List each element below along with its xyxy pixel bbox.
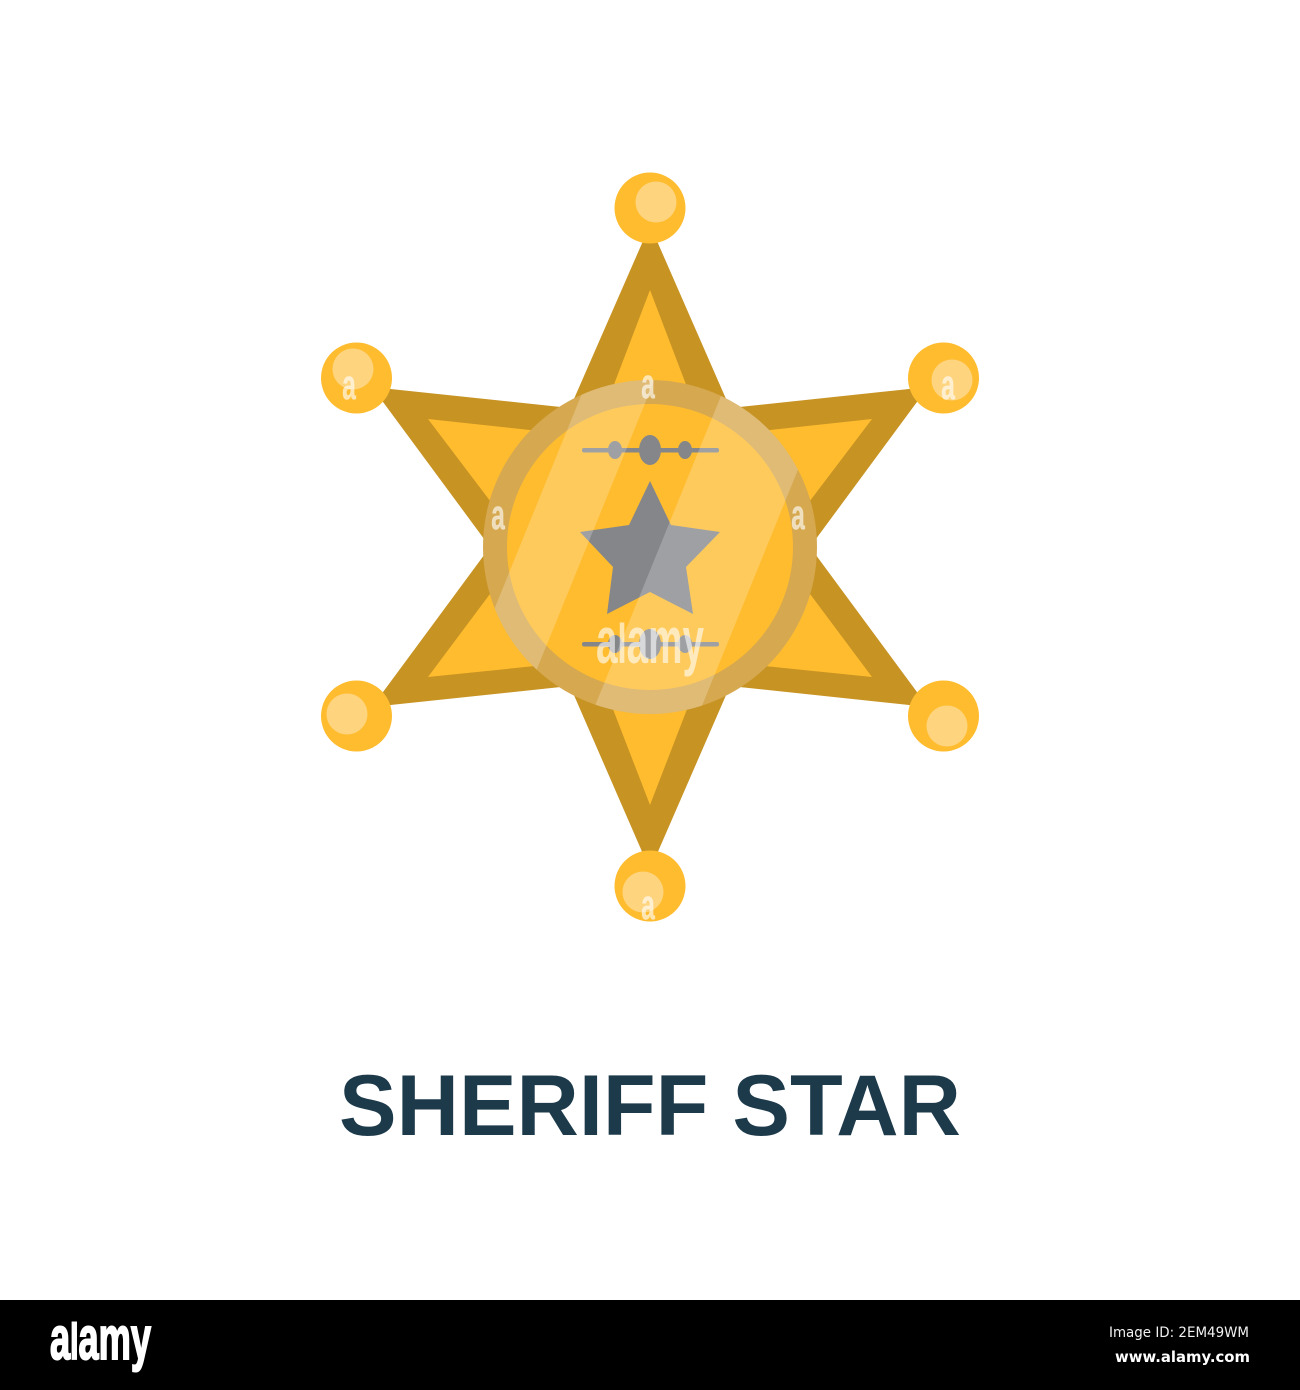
knob: upper right	[908, 342, 979, 414]
watermark: repeated letter marks: a	[641, 361, 655, 408]
watermark: repeated letter marks: a	[491, 492, 505, 539]
medallion ring	[483, 380, 817, 714]
watermark: central logo: alamy	[596, 603, 704, 677]
knob: bottom	[614, 850, 686, 922]
website: www.alamy.com	[1115, 1348, 1250, 1366]
knob: top	[614, 172, 686, 244]
star points inner fill	[428, 290, 872, 805]
footer logo: alamy	[50, 1305, 151, 1372]
star points outer frame	[372, 225, 928, 870]
knob: lower left	[321, 680, 392, 752]
medallion disc	[507, 404, 793, 690]
image id: Image ID: 2EM49WM	[1109, 1325, 1249, 1341]
watermark: repeated letter marks: a	[342, 362, 356, 409]
bottom ornament bar	[582, 629, 719, 659]
watermark: repeated letter marks: a	[791, 492, 805, 539]
footer bar	[0, 1300, 1300, 1390]
central grey star	[580, 481, 720, 614]
knob: lower right	[908, 680, 979, 752]
glass shine bands	[494, 380, 798, 714]
icon: sheriff star badge	[321, 172, 979, 922]
knob: upper left	[321, 342, 392, 414]
watermark: repeated letter marks: a	[641, 882, 655, 929]
top ornament bar	[582, 435, 719, 465]
watermark: repeated letter marks: a	[941, 362, 955, 409]
watermark: repeated letter marks	[342, 361, 955, 929]
title: SHERIFF STAR	[339, 1058, 961, 1154]
